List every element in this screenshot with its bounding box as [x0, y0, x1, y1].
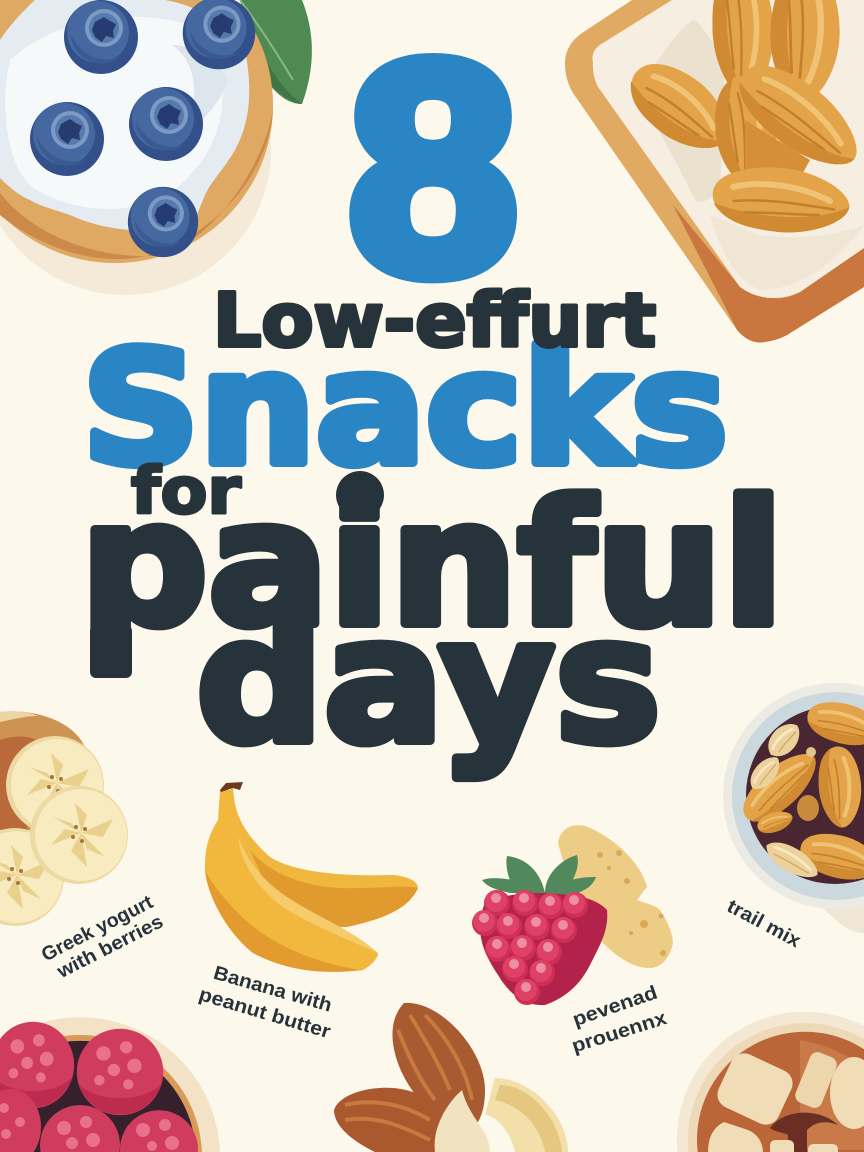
heading: days: days	[196, 580, 661, 782]
label: Banana with peanut butter	[196, 962, 334, 1043]
label: Banana with peanut butter: peanut butter	[196, 983, 333, 1043]
illustration: banana slices	[0, 711, 128, 926]
illustration: yogurt toast with blueberries	[0, 0, 312, 295]
heading: for: for	[131, 455, 241, 529]
label: pevenad prouennx	[569, 982, 669, 1058]
heading: Snacks: Snacks	[82, 318, 728, 500]
illustration: almonds on a tray	[565, 0, 864, 342]
heading: Low-effurt: Low-effurt	[213, 278, 656, 364]
illustration: banana	[205, 782, 418, 972]
heading: painful: painful	[80, 464, 784, 664]
illustration: almonds and cashews	[334, 1002, 568, 1152]
illustration: trail mix bowl	[723, 683, 864, 933]
label: pevenad prouennx: pevenad	[570, 982, 660, 1031]
label: Greek yogurt with berries: with berries	[53, 910, 167, 983]
illustration: raspberry and peanut bar	[472, 825, 673, 1005]
illustration: raspberries bowl	[0, 1017, 220, 1152]
label: Banana with peanut butter: Banana with	[211, 962, 334, 1017]
label: pevenad prouennx: prouennx	[569, 1007, 669, 1058]
illustration: nut bowl	[677, 1012, 864, 1152]
label: Greek yogurt with berries: Greek yogurt	[38, 891, 157, 966]
label: trail mix: trail mix	[723, 895, 804, 952]
big number 8: 8	[349, 0, 517, 335]
